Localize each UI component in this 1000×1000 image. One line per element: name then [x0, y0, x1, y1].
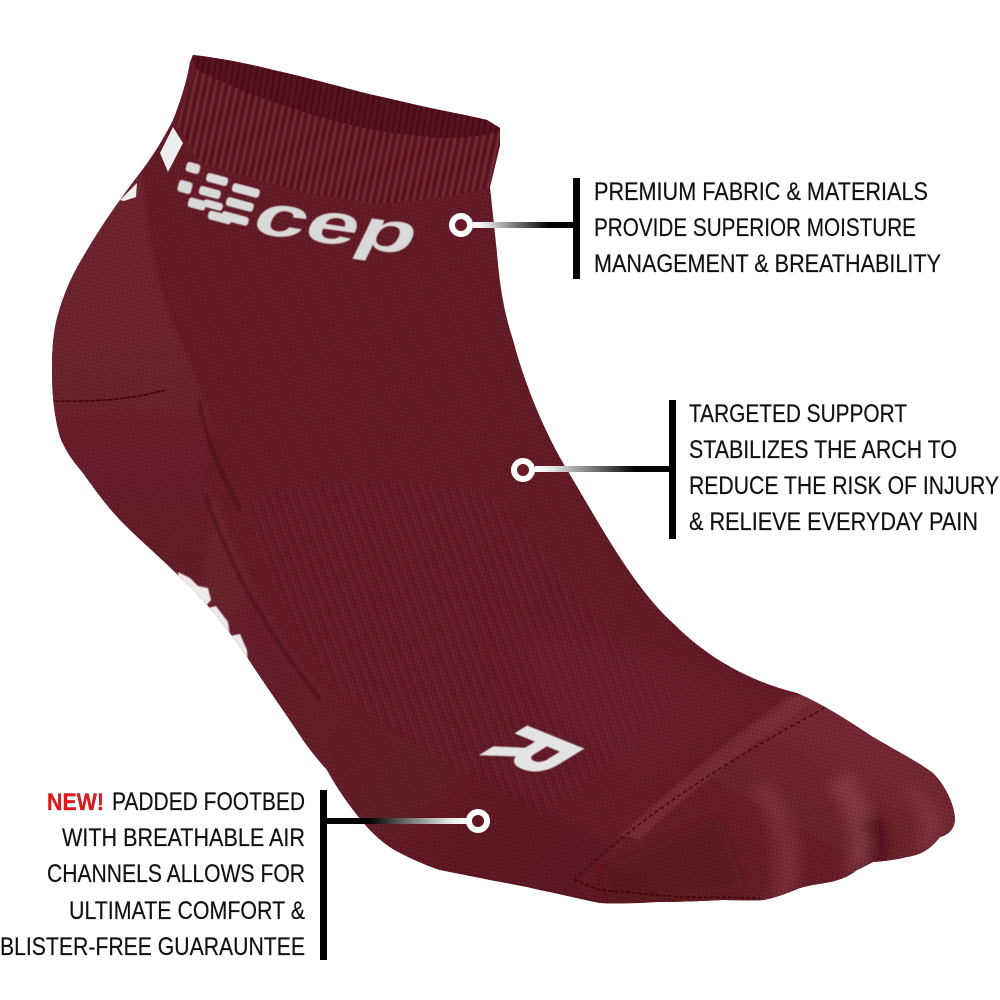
callout text: TARGETED SUPPORT	[689, 400, 907, 428]
connector line	[473, 222, 574, 228]
toe cap	[575, 693, 960, 910]
callout: padded footbed	[0, 788, 487, 961]
callout text	[594, 178, 941, 278]
toe folds	[600, 770, 942, 905]
logo: R mark on forefoot: R	[464, 717, 604, 784]
arch ribbed zone	[245, 481, 680, 815]
callout text	[689, 400, 999, 536]
logo text: cep	[242, 182, 433, 267]
callout: targeted support	[514, 400, 999, 539]
logo stripes icon	[177, 161, 261, 226]
inner cuff	[188, 50, 505, 138]
callout text: ULTIMATE COMFORT &	[69, 897, 305, 925]
connector line	[535, 466, 670, 472]
toe seam	[574, 707, 825, 880]
underside logo marks	[178, 572, 248, 664]
outer cuff ribbing	[202, 132, 500, 202]
callout text: STABILIZES THE ARCH TO	[689, 436, 957, 464]
callout text: PADDED FOOTBED	[112, 788, 305, 816]
arch seam	[199, 400, 320, 700]
divider bar	[320, 790, 327, 960]
callout text: WITH BREATHABLE AIR	[62, 824, 305, 852]
callout text: BLISTER-FREE GUARAUNTEE	[0, 933, 305, 961]
callout text: PROVIDE SUPERIOR MOISTURE	[594, 214, 916, 242]
callout text: NEW!	[47, 789, 104, 816]
callout text: CHANNELS ALLOWS FOR	[47, 860, 305, 888]
white heel marks	[160, 127, 183, 172]
callout text: PREMIUM FABRIC & MATERIALS	[594, 178, 928, 206]
logo: cep wordmark on cuff	[177, 161, 433, 267]
marker dot	[469, 812, 487, 830]
heel panel	[52, 169, 210, 608]
callout text	[0, 788, 305, 961]
heel seam	[54, 390, 165, 401]
forefoot shading	[500, 620, 770, 780]
divider bar	[669, 400, 676, 539]
marker dot	[514, 461, 532, 479]
padded sole band	[200, 490, 620, 910]
toe highlight band	[620, 695, 815, 840]
callout: premium fabric	[452, 178, 941, 279]
knit texture	[40, 160, 970, 920]
marker dot	[452, 216, 470, 234]
connector line	[327, 818, 467, 824]
divider bar	[573, 178, 580, 279]
callout text: MANAGEMENT & BREATHABILITY	[594, 250, 941, 278]
